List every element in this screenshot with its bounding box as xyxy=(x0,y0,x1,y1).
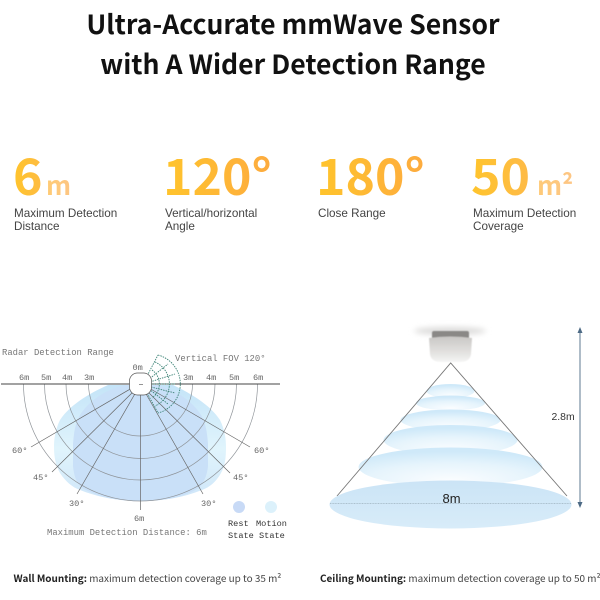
range and angle labels: 3m xyxy=(84,373,94,383)
range and angle labels: 0m xyxy=(132,363,143,373)
range and angle labels: 45° xyxy=(33,473,48,483)
range and angle labels xyxy=(2,348,269,538)
stat: 50 square metres coverage: Coverage xyxy=(473,220,524,233)
motion state area xyxy=(54,385,226,501)
wall line xyxy=(1,383,280,385)
sensor icon xyxy=(130,373,152,395)
stat: 50 square metres coverage xyxy=(471,138,576,233)
legend: State xyxy=(228,531,254,541)
range and angle labels: 4m xyxy=(206,373,216,383)
stat: 6m maximum detection distance: Maximum Detection xyxy=(14,207,117,220)
caption: ceiling mounting: Ceiling Mounting: maximum detection coverage up to 50 m² xyxy=(320,570,600,585)
stat: 180 degree close range: Close Range xyxy=(318,207,386,220)
rest state area xyxy=(73,385,208,501)
stat: 6m maximum detection distance: m xyxy=(46,166,71,203)
stat: 6m maximum detection distance: Distance xyxy=(14,220,59,233)
range and angle labels: 6m xyxy=(19,373,29,383)
range and angle labels: 6m xyxy=(253,373,263,383)
range and angle labels: 60° xyxy=(12,446,27,456)
stat: 6m maximum detection distance xyxy=(13,138,117,233)
range and angle labels: 6m xyxy=(134,514,144,524)
stat: 50 square metres coverage: Maximum Detection xyxy=(473,207,576,220)
range and angle labels: Vertical FOV 120° xyxy=(175,354,266,364)
dimension labels: 8m xyxy=(442,491,461,506)
range and angle labels: 30° xyxy=(69,499,84,509)
range and angle labels: 3m xyxy=(183,373,193,383)
caption: wall mounting: Wall Mounting: maximum detection coverage up to 35 m² xyxy=(14,570,281,585)
range and angle labels: 5m xyxy=(229,373,239,383)
dimension labels: 2.8m xyxy=(552,412,575,423)
title: Ultra-Accurate mmWave Sensor xyxy=(86,3,500,42)
stat: 50 square metres coverage: m² xyxy=(537,166,573,203)
stat: 50 square metres coverage: 50 xyxy=(471,138,530,210)
legend: Motion xyxy=(256,519,287,529)
range and angle labels: 30° xyxy=(201,499,216,509)
stat: 120 degree angle: Vertical/horizontal xyxy=(165,207,257,220)
title xyxy=(86,3,500,82)
stat: 120 degree angle: 120° xyxy=(163,138,272,210)
range arcs xyxy=(24,384,258,501)
diameter line xyxy=(330,502,571,504)
ceiling sensor xyxy=(414,327,486,362)
stat: 120 degree angle: Angle xyxy=(165,220,195,233)
range and angle labels: 4m xyxy=(62,373,72,383)
stat: 180 degree close range: 180° xyxy=(316,138,425,210)
cone lines xyxy=(337,363,567,496)
range and angle labels: 5m xyxy=(41,373,51,383)
angle spokes xyxy=(31,388,250,510)
range and angle labels: 60° xyxy=(254,446,269,456)
legend: Rest xyxy=(228,519,249,529)
dimension labels xyxy=(442,412,575,506)
height arrow xyxy=(578,327,582,508)
stat: 6m maximum detection distance: 6 xyxy=(13,138,42,210)
range and angle labels: Radar Detection Range xyxy=(2,348,114,358)
vertical FOV dashed fan xyxy=(146,355,180,413)
chart: wall mounting radar range xyxy=(1,348,287,541)
range and angle labels: Maximum Detection Distance: 6m xyxy=(47,528,207,538)
legend: State xyxy=(259,531,285,541)
range and angle labels: 45° xyxy=(233,473,248,483)
floor ellipse xyxy=(330,480,572,528)
detection ellipses xyxy=(358,384,542,486)
legend xyxy=(228,501,287,541)
title: with A Wider Detection Range xyxy=(100,43,486,82)
chart: ceiling mounting cone xyxy=(330,327,582,528)
